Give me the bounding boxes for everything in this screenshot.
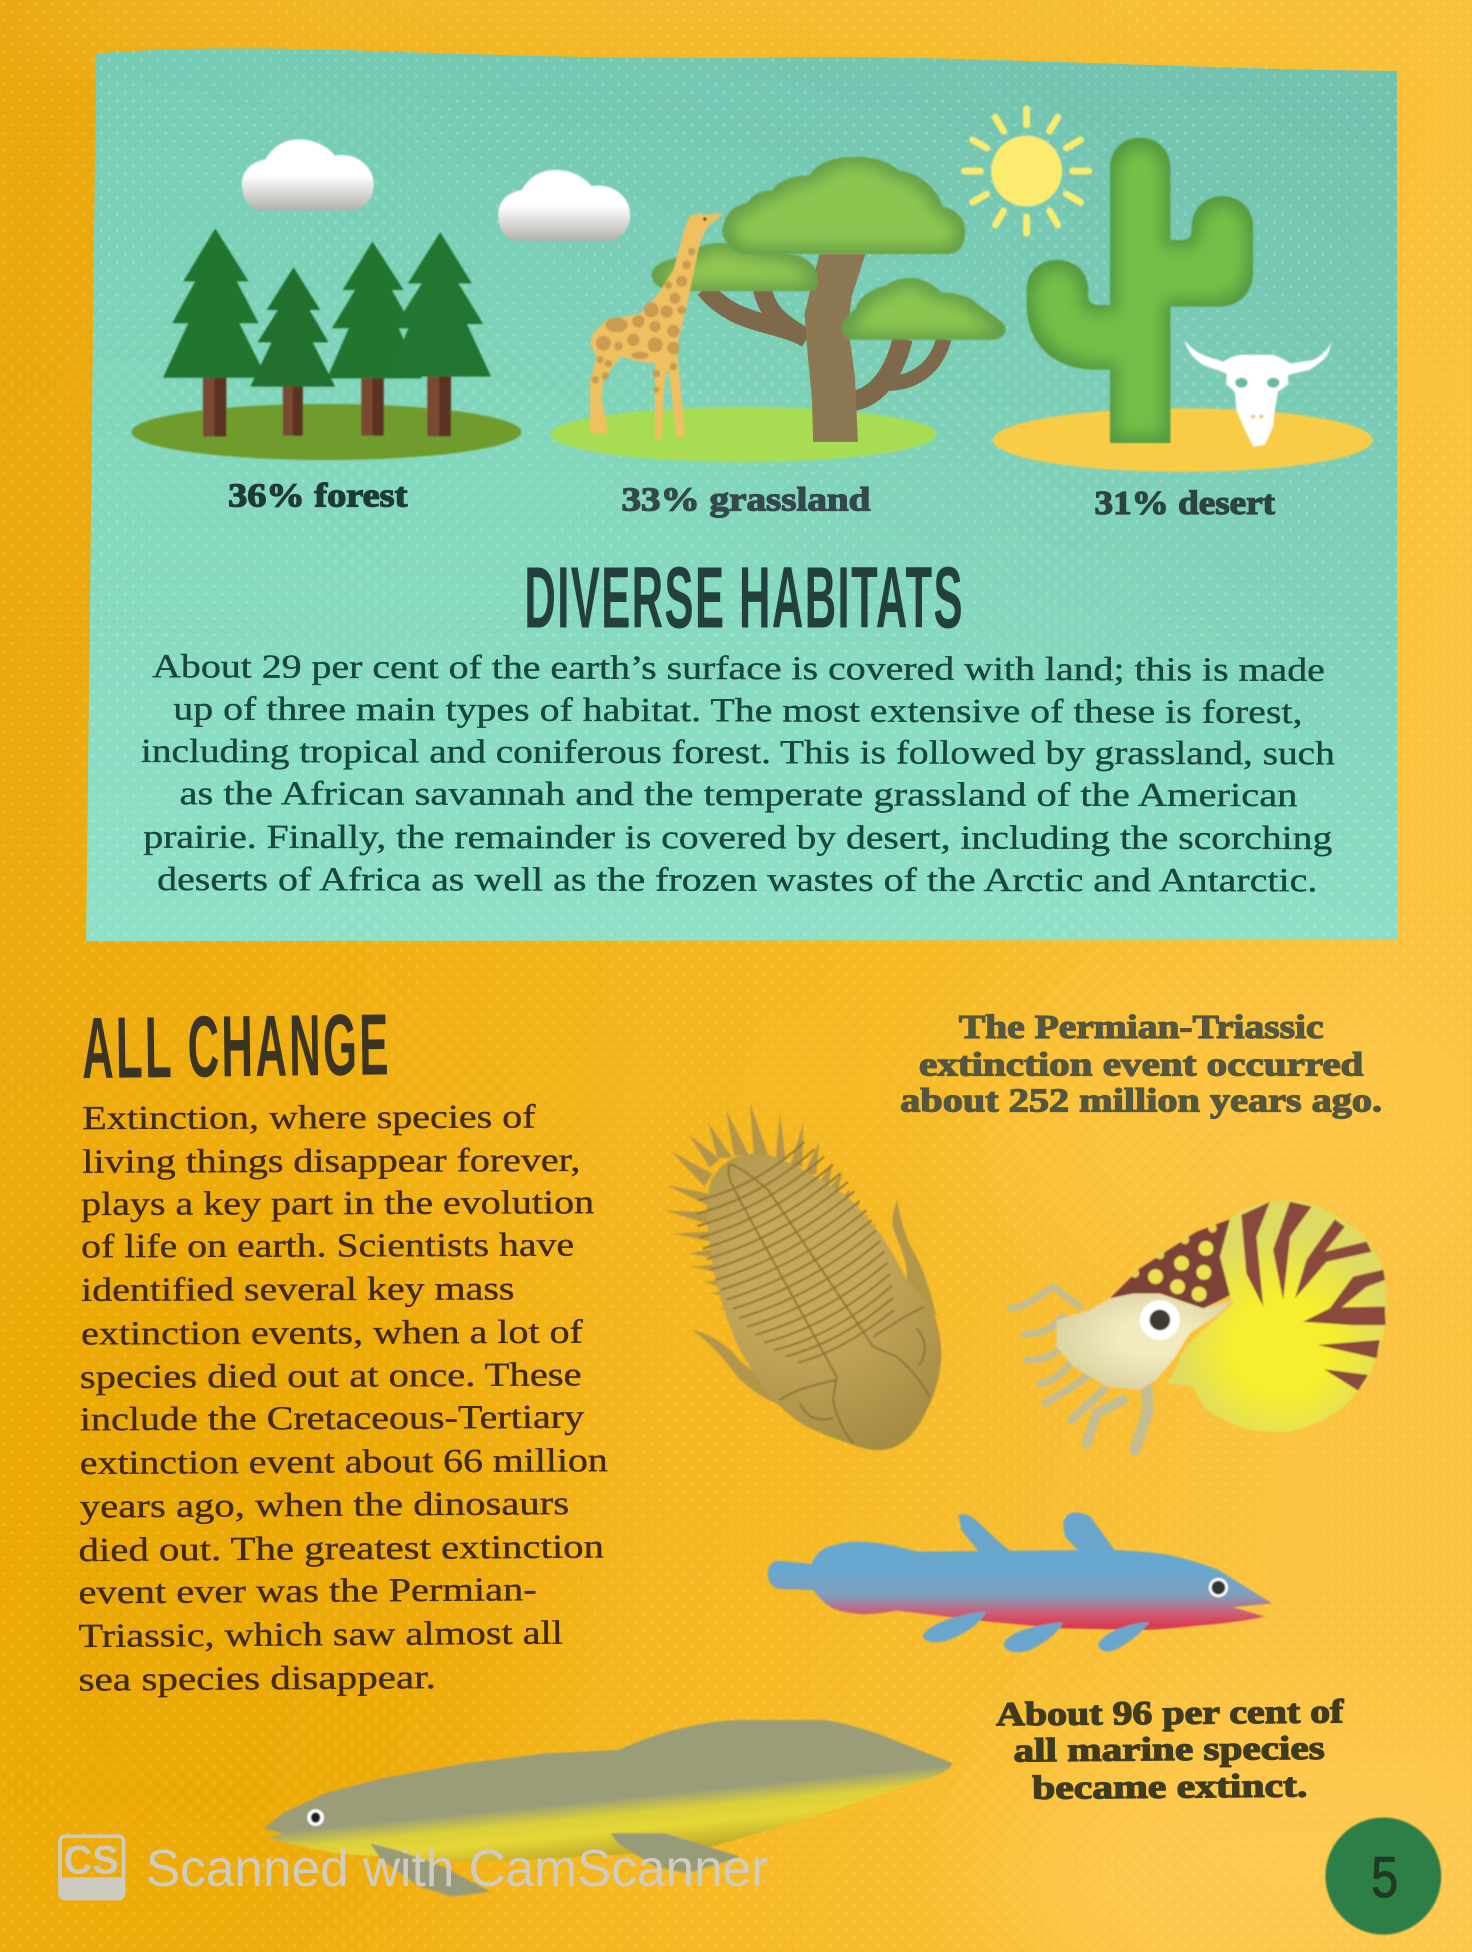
text block: habitats paragraph: as the African savannah and the temperate grassland of the American <box>180 775 1298 814</box>
text block: extinction paragraph: identified several key mass <box>81 1270 514 1309</box>
label: 31% desert: 31% desert <box>1095 485 1276 522</box>
callout: permian-triassic: The Permian-Triassic <box>959 1009 1324 1046</box>
text block: extinction paragraph: species died out at once. These <box>80 1356 582 1396</box>
icon: sun <box>964 109 1089 233</box>
text block: habitats paragraph: including tropical and coniferous forest. This is followed by grassland, such <box>141 733 1335 772</box>
text block: extinction paragraph: years ago, when the dinosaurs <box>80 1485 569 1526</box>
heading: all change: ALL CHANGE <box>81 996 389 1097</box>
illustration: forest <box>132 228 521 460</box>
illustration: nautilus <box>1010 1201 1387 1450</box>
text block: extinction paragraph: Extinction, where species of <box>82 1099 537 1137</box>
text block: habitats paragraph: up of three main types of habitat. The most extensive of these is forest, <box>173 691 1303 731</box>
illustration: grey-yellow fish <box>264 1720 953 1897</box>
icon: bull skull <box>1185 341 1331 447</box>
text block: extinction paragraph: plays a key part in the evolution <box>81 1184 594 1223</box>
page number badge: 5 <box>1371 1847 1398 1910</box>
watermark text: Scanned with CamScanner <box>146 1840 768 1898</box>
tree <box>651 157 1006 442</box>
icon: cloud right <box>498 170 630 241</box>
nautilus head <box>1057 1293 1233 1390</box>
text block: extinction paragraph: of life on earth. Scientists have <box>81 1227 574 1265</box>
panel: diverse habitats <box>86 48 1397 941</box>
icon: cactus <box>1027 138 1253 443</box>
text block: extinction paragraph: include the Cretaceous-Tertiary <box>80 1399 584 1438</box>
illustration: grassland <box>551 157 1006 462</box>
text block: extinction paragraph: extinction events, when a lot of <box>81 1314 584 1352</box>
heading: diverse habitats: DIVERSE HABITATS <box>524 549 963 646</box>
illustration: blue lungfish <box>768 1513 1272 1652</box>
text block: extinction paragraph: Triassic, which saw almost all <box>78 1615 563 1655</box>
callout: marine species: became extinct. <box>1032 1767 1307 1807</box>
text block: habitats paragraph: deserts of Africa as well as the frozen wastes of the Arctic and Antarctic. <box>157 861 1317 899</box>
text block: extinction paragraph: died out. The greatest extinction <box>78 1528 604 1569</box>
label: 33% grassland: 33% grassland <box>621 481 871 518</box>
icon: camscanner logo: CS <box>64 1839 119 1883</box>
callout: marine species: all marine species <box>1013 1730 1325 1770</box>
icon: cloud left <box>242 139 374 210</box>
text block: habitats paragraph: prairie. Finally, the remainder is covered by desert, including the scorching <box>143 819 1333 857</box>
text block: extinction paragraph: event ever was the Permian- <box>78 1571 537 1611</box>
nautilus stripes <box>1241 1202 1385 1391</box>
trilobite body <box>707 1154 941 1450</box>
text block: extinction paragraph: sea species disappear. <box>78 1659 436 1699</box>
icon: giraffe <box>590 213 724 440</box>
trilobite head lines <box>728 1164 930 1443</box>
illustration: trilobite <box>665 1103 941 1450</box>
page number badge <box>1325 1818 1441 1935</box>
trilobite ribs <box>678 1132 917 1383</box>
callout: permian-triassic: extinction event occurred <box>919 1047 1364 1084</box>
callout: permian-triassic: about 252 million years ago. <box>900 1083 1382 1120</box>
callout: marine species: About 96 per cent of <box>996 1693 1345 1733</box>
text block: habitats paragraph <box>141 648 1335 899</box>
label: 36% forest: 36% forest <box>228 478 408 515</box>
nautilus hood <box>1110 1219 1230 1308</box>
icon: camscanner logo <box>60 1836 124 1900</box>
text block: extinction paragraph: living things disappear forever, <box>82 1142 580 1181</box>
nautilus tentacles <box>1010 1287 1148 1450</box>
text block: habitats paragraph: About 29 per cent of the earth’s surface is covered with land; this is made <box>152 648 1325 689</box>
callout: marine species <box>996 1693 1345 1807</box>
trilobite spines and horns <box>665 1103 936 1404</box>
callout: permian-triassic <box>900 1009 1382 1120</box>
illustration: desert <box>993 138 1373 472</box>
text block: extinction paragraph <box>78 1099 608 1699</box>
nautilus shell <box>1167 1201 1387 1432</box>
text block: extinction paragraph: extinction event about 66 million <box>80 1442 608 1482</box>
